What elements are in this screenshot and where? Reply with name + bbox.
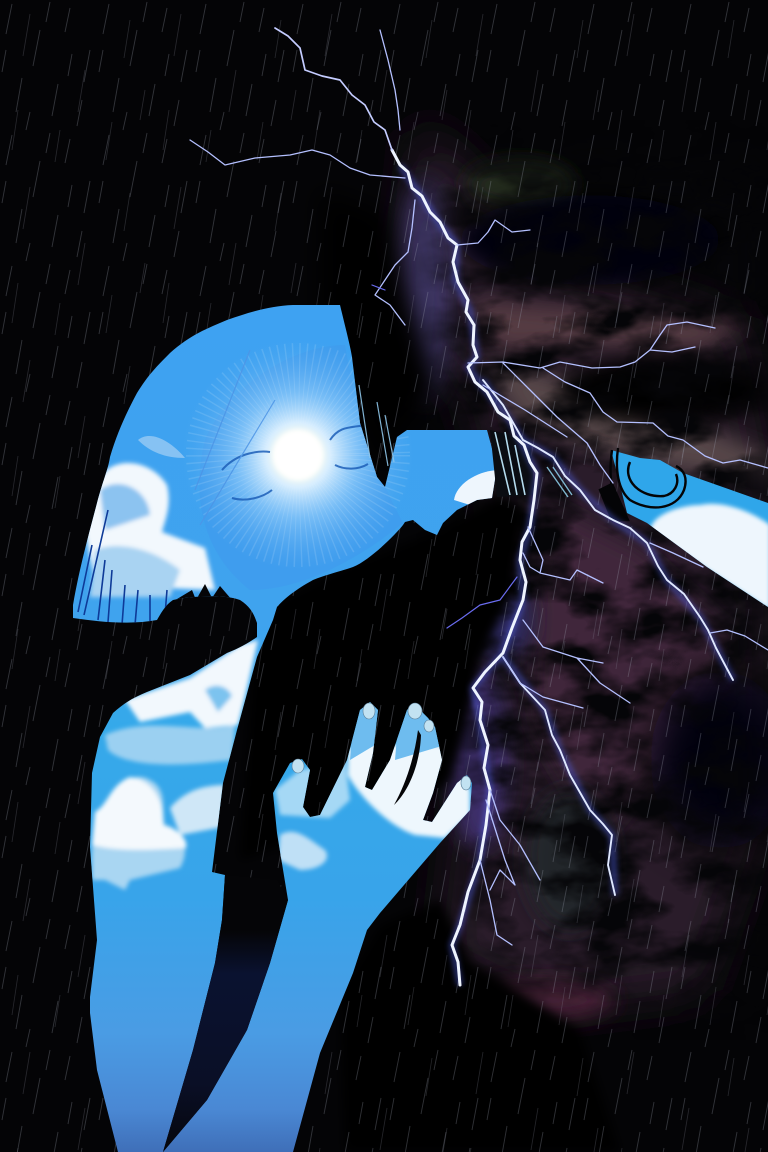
sky silhouette: hand and arm <box>160 700 480 1152</box>
sun rays <box>226 383 370 527</box>
purple branch <box>372 285 517 628</box>
upper bolt <box>275 28 392 150</box>
black hair and arm mass <box>240 190 620 1152</box>
storm figure <box>397 120 768 1020</box>
fingernails <box>292 703 471 790</box>
thin branches <box>190 30 768 945</box>
sun <box>273 430 323 480</box>
main bolt <box>392 150 537 985</box>
eye strokes <box>195 350 368 525</box>
sky silhouette: right eye gap <box>612 450 768 607</box>
face <box>358 404 386 487</box>
hair strands over nose <box>490 430 572 497</box>
hair curls at eye gap <box>600 448 686 520</box>
sky silhouette: head and body <box>60 295 520 1152</box>
lower right bolts <box>483 380 733 895</box>
finger light tops <box>350 700 445 760</box>
sun halo <box>198 354 400 556</box>
lightning glow <box>400 165 733 985</box>
dark blade <box>163 875 288 1152</box>
nose cloud <box>454 470 495 504</box>
lightning bolts <box>190 28 768 985</box>
storm texture <box>415 164 768 1000</box>
hand clouds <box>275 742 470 870</box>
lower left cloud <box>92 777 225 890</box>
thin finger line <box>394 730 421 805</box>
hair strands beside face <box>359 385 394 466</box>
grass <box>78 510 167 625</box>
grass tips <box>176 584 230 600</box>
small cloud <box>138 436 185 458</box>
cloud left <box>85 463 215 597</box>
upper clouds <box>105 640 258 764</box>
